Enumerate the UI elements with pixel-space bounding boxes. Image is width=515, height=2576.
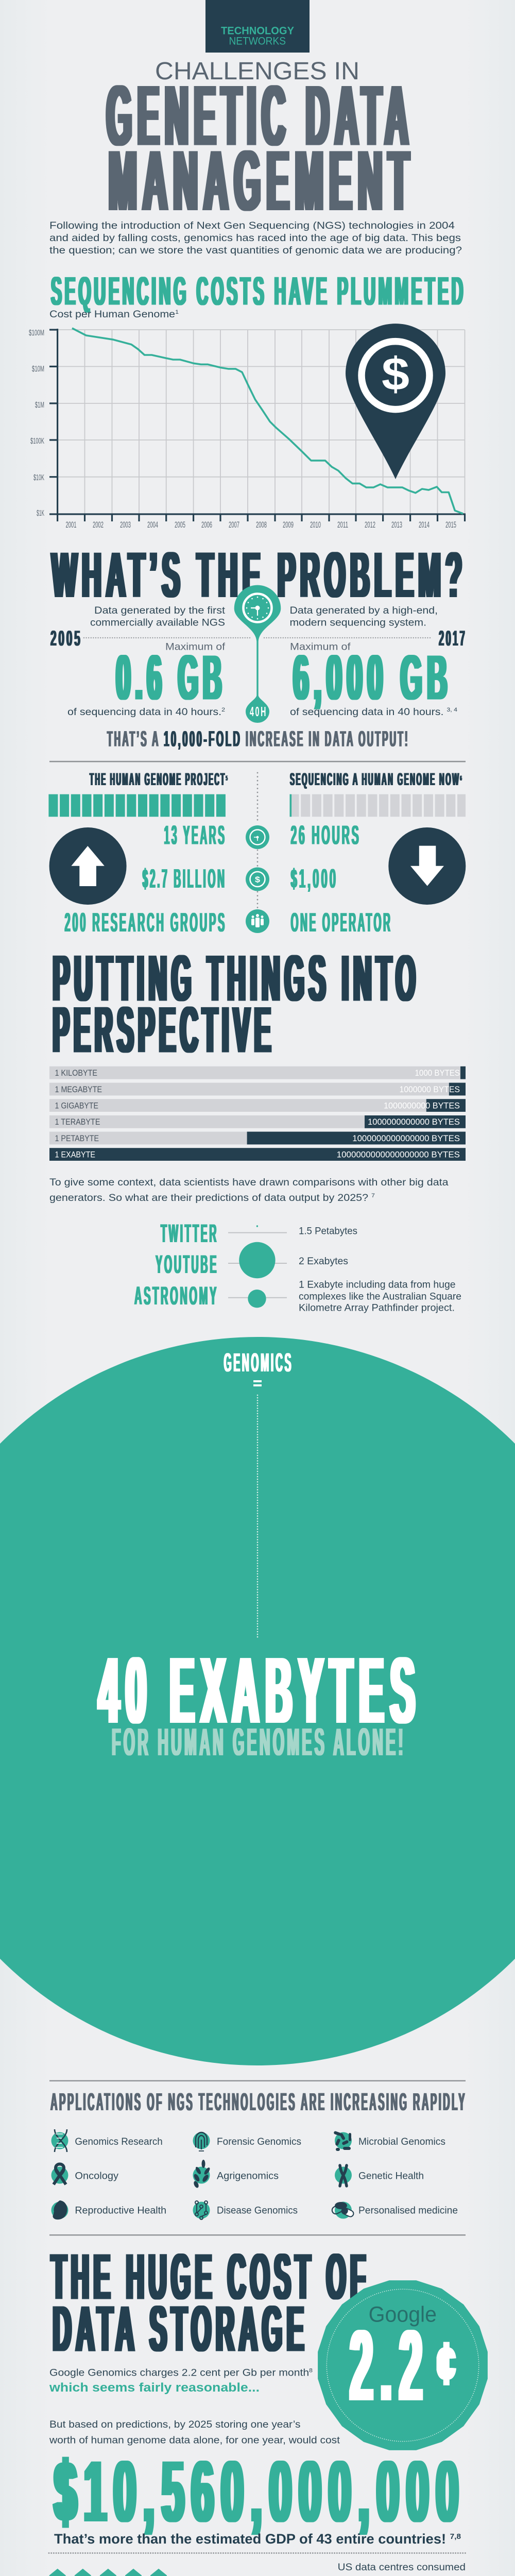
icon: dollar map pin — [346, 324, 445, 479]
comparison: big data generators: complexes like the Australian Square — [299, 1291, 461, 1302]
icon: fingerprint — [193, 2132, 210, 2151]
comparison left: 2005: Data generated by the first — [94, 605, 226, 616]
chart y axis labels — [29, 329, 44, 518]
cost line — [72, 328, 463, 514]
application labels: Disease Genomics — [217, 2206, 298, 2216]
chart: byte scale bars: 1 EXABYTE — [55, 1150, 95, 1160]
chart: byte scale bars: 1000000 BYTES — [400, 1085, 460, 1094]
chart x axis labels: 2013 — [391, 520, 402, 530]
panel: human genome project vs now — [48, 770, 466, 938]
application labels: Forensic Genomics — [217, 2137, 301, 2147]
callout: 10,000-fold: THAT’S A — [107, 727, 160, 752]
chart x axis labels: 2010 — [310, 520, 321, 530]
chart x axis labels: 2001 — [66, 520, 76, 530]
chart x axis labels: 2012 — [365, 520, 375, 530]
application labels: Microbial Genomics — [358, 2137, 445, 2147]
chart x axis labels: 2015 — [445, 520, 456, 530]
panel: genomics giant circle: GENOMICS — [224, 1348, 293, 1377]
icon: money — [246, 868, 269, 891]
icon: chromosome — [335, 2165, 352, 2186]
context paragraph: To give some context, data scientists have drawn comparisons with other big data — [49, 1177, 449, 1188]
comparison: big data generators: 2 Exabytes — [299, 1256, 348, 1267]
stat labels: $2.7 BILLION — [142, 864, 227, 894]
badge: Google 2.2 cents — [318, 2280, 488, 2450]
panel: human genome project vs now: 5 — [226, 774, 229, 782]
logo: Technology Networks — [205, 0, 310, 53]
chart: byte scale bars: 1000 BYTES — [415, 1069, 460, 1078]
comparison: big data generators: 1 Exabyte including data from huge — [299, 1280, 456, 1291]
chart x axis labels — [66, 520, 456, 530]
application labels: Reproductive Health — [75, 2206, 166, 2216]
chart y axis labels: $1K — [37, 509, 44, 518]
application labels: Genomics Research — [75, 2137, 163, 2147]
intro paragraph: and aided by falling costs, genomics has raced into the age of big data. This begs — [49, 233, 461, 244]
title: CHALLENGES IN — [155, 58, 359, 85]
chart y axis labels: $10K — [33, 473, 44, 482]
chart subtitle: 1 — [175, 309, 179, 315]
badge: Google 2.2 cents: ¢ — [437, 2329, 461, 2398]
chart x axis labels: 2002 — [93, 520, 104, 530]
text block: Google Genomics pricing: But based on predictions, by 2025 storing one year’s — [49, 2419, 301, 2430]
chart x axis labels: 2007 — [229, 520, 239, 530]
comparison right: 2017: Data generated by a high-end, — [289, 605, 438, 616]
icon: down arrow — [388, 827, 466, 905]
icon: dollar map pin: $ — [382, 349, 409, 400]
icon: bacteria — [333, 2131, 352, 2151]
comparison right: 2017: Maximum of — [290, 642, 351, 653]
chart x axis labels: 2003 — [120, 520, 131, 530]
callout: 10,000-fold — [107, 727, 409, 752]
chart: byte scale bars: 1 KILOBYTE — [55, 1069, 97, 1078]
application labels: Oncology — [75, 2171, 119, 2181]
panel: genomics giant circle — [0, 1337, 515, 2065]
chart: byte scale bars: 1 PETABYTE — [55, 1134, 99, 1143]
context paragraph: generators. So what are their predictions of data output by 2025? — [49, 1193, 331, 1204]
comparison left: 2005: commercially available NGS — [90, 618, 225, 629]
context paragraph: 7 — [371, 1193, 375, 1199]
application labels: Genetic Health — [358, 2171, 424, 2181]
icon: up arrow — [49, 827, 127, 905]
chart x axis labels: 2006 — [201, 520, 212, 530]
line chart: cost per human genome — [29, 324, 466, 530]
comparison left: 2005: 2 — [221, 707, 225, 713]
text block: Google Genomics pricing: Google Genomics charges 2.2 cent per Gb per month — [49, 2367, 282, 2378]
chart: byte scale bars: 1 MEGABYTE — [55, 1085, 102, 1094]
application labels — [75, 2137, 458, 2216]
intro paragraph: Following the introduction of Next Gen Sequencing (NGS) technologies in 2004 — [49, 221, 455, 231]
comparison left: 2005: 0.6 GB — [116, 642, 227, 714]
comparison: big data generators: ASTRONOMY — [134, 1281, 218, 1310]
callout: GDP: 7,8 — [450, 2532, 461, 2541]
text block: Google Genomics pricing: 8 — [309, 2367, 313, 2374]
panel: human genome project vs now: 6 — [460, 774, 463, 782]
chart y axis labels: $100K — [30, 437, 44, 446]
chart y axis labels: $100M — [29, 329, 44, 337]
chart x axis labels: 2004 — [147, 520, 158, 530]
comparison: big data generators — [134, 1218, 461, 1314]
text block: energy use: US data centres consumed — [338, 2562, 466, 2573]
comparison left: 2005: 2005 — [50, 626, 82, 650]
intro paragraph: the question; can we store the vast quantities of genomic data we are producing? — [49, 245, 462, 256]
comparison right: 2017 — [264, 605, 467, 718]
chart subtitle: Cost per Human Genome — [49, 309, 161, 320]
panel: human genome project vs now: THE HUMAN GENOME PROJECT — [90, 770, 443, 789]
application labels: Agrigenomics — [217, 2171, 279, 2181]
title — [107, 58, 415, 229]
comparison right: 2017: of sequencing data in 40 hours. — [290, 707, 426, 718]
icon: timeline clock balloon — [234, 585, 281, 723]
chart x axis labels: 2011 — [337, 520, 348, 530]
panel: applications list — [52, 2129, 458, 2219]
chart: byte scale bars: 1000000000000000000 BYTES — [337, 1150, 460, 1160]
comparison left: 2005 — [50, 605, 251, 718]
comparison left: 2005: of sequencing data in 40 hours. — [67, 707, 204, 718]
icon: timeline clock balloon: 40H — [250, 704, 267, 719]
chart x axis labels: 2008 — [256, 520, 267, 530]
icon: circuit — [193, 2201, 210, 2219]
stat labels: 26 HOURS — [290, 820, 360, 850]
chart: byte scale bars: 1 GIGABYTE — [55, 1101, 98, 1110]
heading: huge cost of data storage — [52, 2240, 370, 2365]
text: 2017 — [439, 626, 467, 650]
stat labels: 200 RESEARCH GROUPS — [65, 908, 227, 938]
chart x axis labels: 2014 — [419, 520, 430, 530]
icon: embryo — [52, 2200, 68, 2219]
chart x axis labels: 2005 — [175, 520, 185, 530]
heading: putting things into perspective — [53, 942, 420, 1066]
icon: wheat — [193, 2160, 211, 2189]
stat labels — [65, 820, 392, 938]
intro paragraph — [49, 221, 462, 256]
icon: DNA — [52, 2129, 68, 2152]
text block: Google Genomics pricing — [49, 2367, 340, 2446]
callout: 10,000-fold: 10,000-FOLD — [164, 727, 242, 752]
chart y axis labels: $10M — [32, 365, 44, 374]
stat labels: $1,000 — [290, 864, 338, 894]
comparison: big data generators: Kilometre Array Pathfinder project. — [299, 1302, 455, 1314]
icon: ribbon — [52, 2164, 68, 2184]
chart x axis labels: 2009 — [283, 520, 294, 530]
chart: byte scale bars: 1000000000 BYTES — [384, 1101, 460, 1110]
text block: Google Genomics pricing: which seems fairly reasonable... — [49, 2381, 260, 2395]
chart: byte scale bars: 1 TERABYTE — [55, 1117, 100, 1127]
logo: Technology Networks: TECHNOLOGY — [221, 25, 294, 37]
stat labels: 13 YEARS — [164, 820, 227, 850]
context paragraph — [49, 1177, 449, 1204]
icon: pill — [332, 2202, 354, 2218]
comparison right: 2017: modern sequencing system. — [289, 618, 426, 629]
comparison: big data generators: 1.5 Petabytes — [299, 1226, 357, 1236]
icon: money: $ — [255, 876, 260, 884]
icon: people — [246, 909, 269, 933]
bar: 13 years — [48, 794, 226, 817]
text block: Google Genomics pricing: worth of human genome data alone, for one year, would cost — [49, 2435, 340, 2446]
comparison right: 2017: 3, 4 — [447, 707, 457, 713]
chart: byte scale bars — [49, 1066, 466, 1161]
comparison: big data generators: YOUTUBE — [156, 1249, 218, 1279]
logo: Technology Networks: NETWORKS — [229, 35, 286, 47]
bar: 26 hours — [289, 794, 466, 817]
icon: clock — [246, 825, 269, 849]
chart: house pictogram — [49, 2569, 167, 2576]
chart: byte scale bars: 1000000000000 BYTES — [368, 1117, 460, 1127]
comparison left: 2005: Maximum of — [165, 642, 226, 653]
chart: byte scale bars: 1000000000000000 BYTES — [352, 1134, 460, 1143]
comparison: big data generators: TWITTER — [161, 1218, 218, 1248]
callout: GDP: That’s more than the estimated GDP of 43 entire countries! — [54, 2531, 437, 2547]
badge: Google 2.2 cents: Google — [369, 2302, 437, 2327]
application labels: Personalised medicine — [358, 2206, 458, 2216]
chart y axis labels: $1M — [35, 401, 44, 410]
